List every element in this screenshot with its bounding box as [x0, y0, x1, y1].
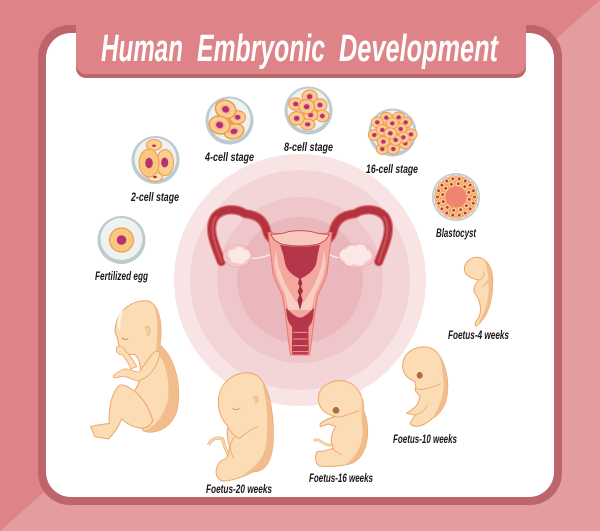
forearm to face [116, 346, 137, 369]
label: 8-cell stage [284, 142, 333, 154]
vagina [286, 308, 314, 354]
title [101, 28, 499, 70]
stage: 2-cell [130, 136, 180, 204]
zona [284, 86, 332, 134]
figure [208, 373, 273, 481]
zona [132, 136, 180, 184]
title banner [76, 20, 526, 78]
concentric circles behind uterus [174, 154, 426, 406]
back shading [143, 302, 179, 432]
foetus: 16 weeks [309, 381, 373, 485]
stage: blastocyst [432, 173, 480, 240]
stage: 8-cell [284, 86, 333, 154]
ovarian ligaments [250, 253, 342, 258]
zona [432, 173, 480, 221]
label: 4-cell stage [204, 152, 254, 164]
panel: white card [38, 25, 562, 505]
foetus: 4 weeks [448, 257, 509, 342]
label: Foetus-16 weeks [309, 473, 373, 485]
figure [403, 347, 448, 426]
foetus: full term [91, 301, 179, 439]
label: Blastocyst [436, 228, 477, 240]
left ovary [223, 245, 251, 267]
stage: 4-cell [204, 96, 254, 164]
torso and head [115, 301, 179, 432]
leg [91, 385, 153, 439]
label: Foetus-4 weeks [448, 330, 509, 342]
zona [368, 108, 416, 156]
label: 16-cell stage [366, 164, 418, 176]
label: Foetus-20 weeks [206, 484, 272, 496]
uterine wall [275, 250, 325, 310]
cells [289, 90, 329, 130]
stage: fertilized egg [95, 216, 148, 283]
vaginal ridges [293, 332, 308, 352]
title: Embryonic [197, 28, 325, 70]
stage: 16-cell [366, 108, 418, 176]
face details [122, 338, 128, 340]
uterine cavity [280, 245, 320, 279]
zona [98, 216, 146, 264]
cell ring [434, 175, 478, 219]
zona [206, 96, 254, 144]
cervical canal [297, 277, 303, 310]
right fallopian tube [317, 210, 388, 262]
left fallopian tube [212, 210, 283, 262]
cells [139, 140, 174, 182]
label: Foetus-10 weeks [393, 434, 457, 446]
figure [464, 257, 493, 326]
foetus: 10 weeks [393, 347, 457, 446]
uterus illustration [212, 210, 388, 355]
figure [315, 381, 368, 466]
egg cell [110, 228, 134, 252]
label: 2-cell stage [130, 192, 179, 204]
label: Fertilized egg [95, 271, 148, 283]
title: Development [339, 28, 499, 70]
arm [113, 351, 160, 381]
uterus body [268, 232, 332, 355]
title: Human [101, 28, 183, 70]
foetus: 20 weeks [206, 373, 273, 496]
cells [207, 97, 246, 141]
cells [368, 112, 417, 154]
right ovary [339, 244, 375, 268]
fundus [271, 231, 329, 246]
